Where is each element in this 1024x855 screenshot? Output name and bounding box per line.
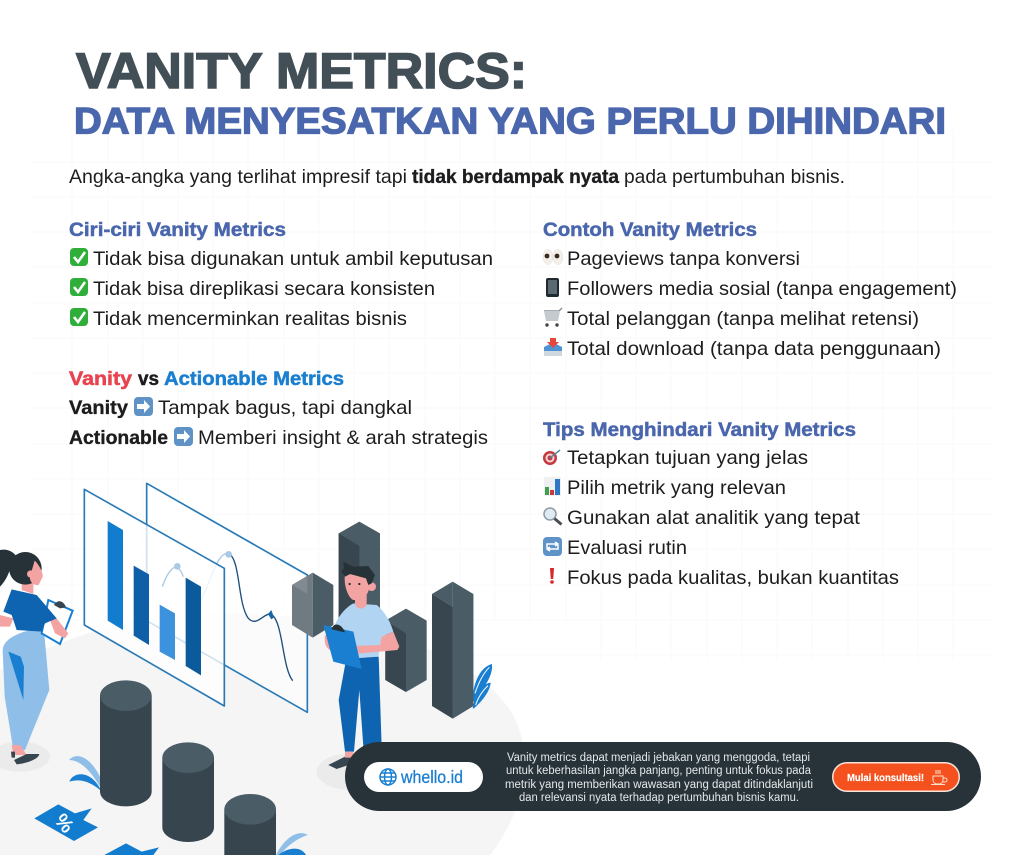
- percent tag 2: [104, 843, 159, 855]
- tip: tujuan: Tetapkan tujuan yang jelas: [567, 447, 808, 469]
- CTA button: [833, 763, 959, 791]
- tip: alat: Gunakan alat analitik yang tepat: [567, 507, 861, 529]
- intro text: tidak berdampak nyata: [412, 166, 619, 188]
- panel: ciri-ciri: [69, 219, 493, 330]
- title line 2: DATA MENYESATKAN YANG PERLU DIHINDARI: [74, 100, 946, 142]
- shirt: [333, 603, 393, 658]
- vanity row: Vanity: [69, 397, 128, 419]
- tip: kualitas: Fokus pada kualitas, bukan kuantitas: [567, 567, 899, 589]
- logo pill: [364, 762, 483, 792]
- heading: contoh: Contoh Vanity Metrics: [543, 219, 757, 241]
- prism: translucent: [292, 573, 333, 638]
- panel: tips: [543, 419, 899, 589]
- title line 1: VANITY METRICS:: [76, 43, 527, 99]
- heading: vanity vs actionable: Actionable Metrics: [164, 368, 344, 390]
- bar 4: [186, 578, 201, 675]
- trousers: [3, 629, 49, 750]
- actionable row: Actionable: [69, 427, 168, 449]
- person: man: [323, 562, 399, 769]
- bar 2: [134, 566, 149, 645]
- item 3: Tidak mencerminkan realitas bisnis: [93, 308, 407, 330]
- closing message: metrik yang memberikan wawasan yang dapat ditindaklanjuti: [505, 779, 813, 791]
- item 1: Tidak bisa digunakan untuk ambil keputusan: [93, 248, 493, 270]
- panel: contoh: [543, 219, 957, 360]
- title: [74, 43, 946, 142]
- actionable row: Memberi insight & arah strategis: [198, 427, 488, 449]
- cylinder 2: [162, 742, 214, 842]
- CTA button: Mulai konsultasi!: [847, 772, 924, 784]
- bar 3: [160, 605, 175, 660]
- tip: evaluasi: Evaluasi rutin: [567, 537, 687, 559]
- item: download: Total download (tanpa data penggunaan): [567, 338, 941, 360]
- panel: vanity vs actionable: [69, 368, 488, 449]
- heading: tips: Tips Menghindari Vanity Metrics: [543, 419, 856, 441]
- item 2: Tidak bisa direplikasi secara konsisten: [93, 278, 435, 300]
- closing message: untuk keberhasilan jangka panjang, penting untuk fokus pada: [506, 765, 812, 777]
- prism: front: [432, 582, 473, 719]
- neck: [22, 582, 33, 594]
- intro text: pada pertumbuhan bisnis.: [624, 166, 845, 188]
- percent tag 1: %: [50, 810, 78, 838]
- icon: coffee cup: [931, 770, 947, 784]
- footer bar: [345, 742, 981, 811]
- item: followers: Followers media sosial (tanpa engagement): [567, 278, 957, 300]
- heading: vanity vs actionable: vs: [138, 368, 159, 390]
- heading: ciri-ciri: Ciri-ciri Vanity Metrics: [69, 219, 286, 241]
- actionable row: [69, 427, 488, 449]
- ground: [0, 613, 525, 855]
- cylinder 1: [100, 680, 152, 806]
- prism: middle: [385, 609, 427, 692]
- illustration: analytics scene: [0, 483, 525, 855]
- plant: left: [69, 756, 100, 790]
- neck: [355, 595, 367, 609]
- closing message: [505, 752, 813, 804]
- shoes: [12, 745, 27, 755]
- shoe: [328, 757, 353, 769]
- clipboard: [323, 625, 362, 669]
- arms: [50, 618, 68, 638]
- percent tag 1: [34, 804, 98, 841]
- cylinder 3: [224, 794, 276, 855]
- prism: back: [339, 522, 380, 627]
- head: [9, 552, 42, 585]
- plant: right: [473, 664, 492, 708]
- globe icon: [380, 769, 396, 785]
- closing message: Vanity metrics dapat menjadi jebakan yang menggoda, tetapi: [507, 752, 810, 764]
- shirt: [3, 589, 57, 632]
- heading: vanity vs actionable: Vanity: [69, 368, 132, 390]
- clipboard: [42, 600, 73, 644]
- tip: metrik: Pilih metrik yang relevan: [567, 477, 786, 499]
- trousers: [339, 657, 382, 752]
- face: [345, 572, 369, 600]
- intro text: Angka-angka yang terlihat impresif tapi: [69, 166, 407, 188]
- hair: [341, 562, 375, 585]
- closing message: dan relevansi nyata terhadap pertumbuhan bisnis kamu.: [519, 792, 799, 804]
- bar 1: [108, 521, 123, 630]
- plant: bottom: [276, 833, 308, 855]
- item: pageviews: Pageviews tanpa konversi: [567, 248, 800, 270]
- person: woman: [0, 550, 73, 764]
- arms: [343, 632, 399, 654]
- logo text: whello.id: [400, 767, 463, 787]
- front chart panel: [84, 489, 224, 706]
- vanity row: Tampak bagus, tapi dangkal: [158, 397, 412, 419]
- rear chart panel: [147, 483, 307, 712]
- ponytail: [0, 550, 16, 587]
- item: pelanggan: Total pelanggan (tanpa melihat retensi): [567, 308, 919, 330]
